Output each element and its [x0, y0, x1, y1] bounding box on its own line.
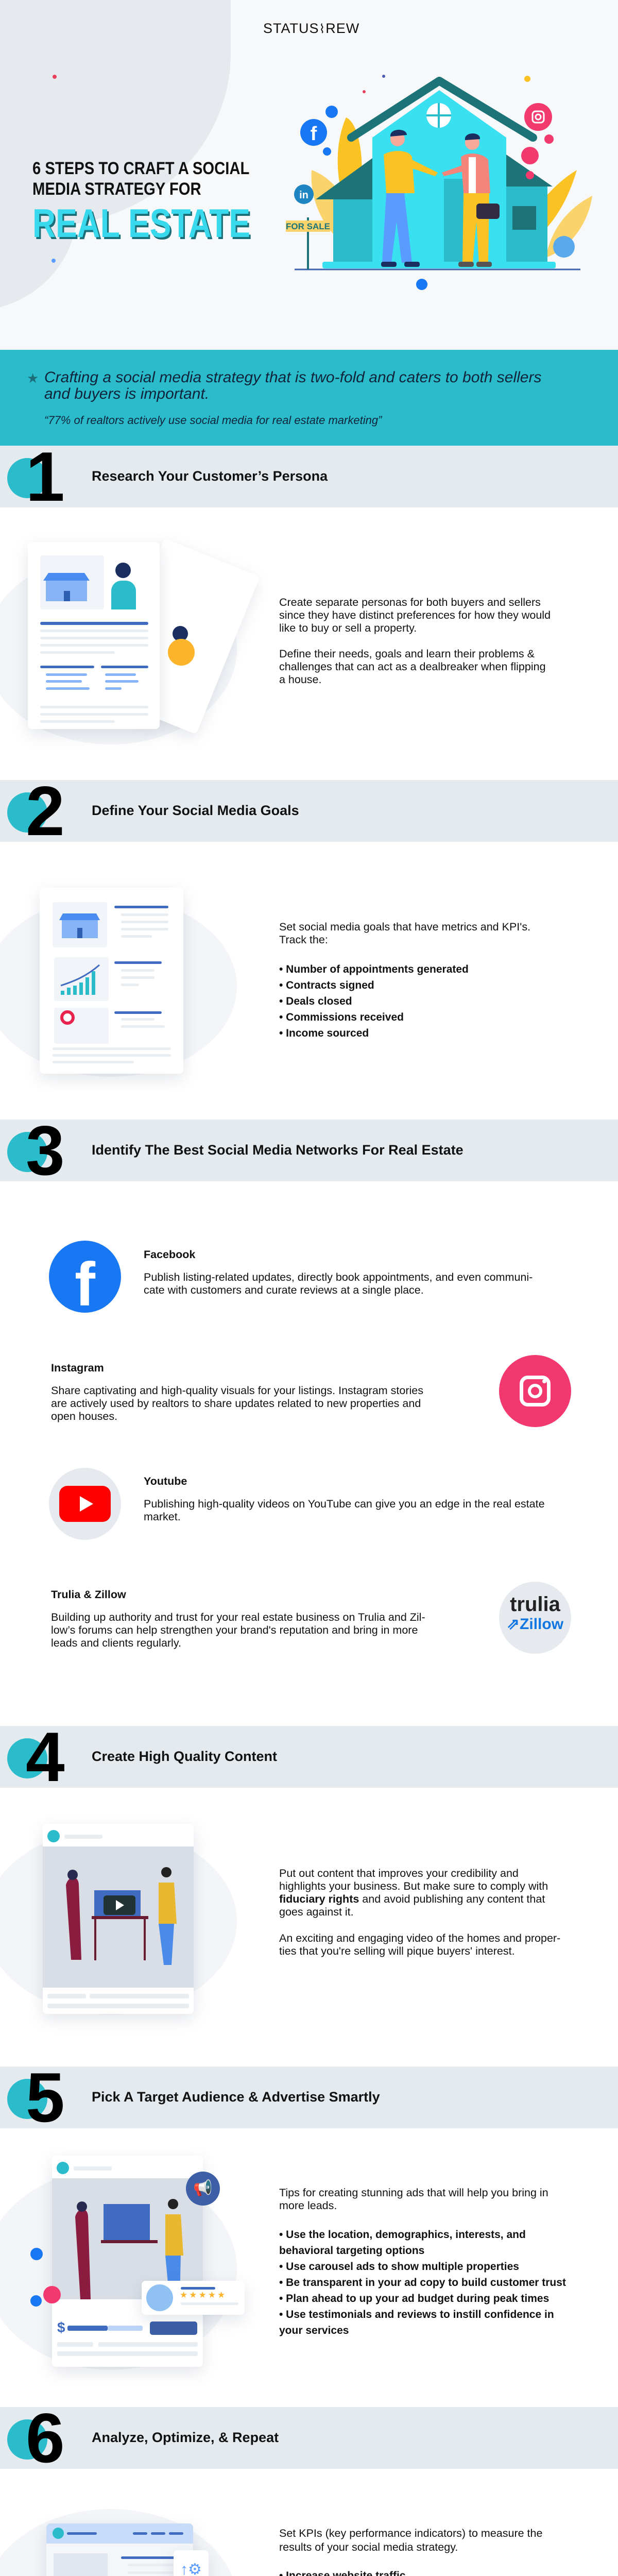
- step 6 header: 6: [26, 2399, 65, 2477]
- step 3 header: 3: [26, 1111, 65, 1190]
- instagram text: Instagram: [51, 1362, 104, 1374]
- step 1 text: a house.: [279, 673, 321, 686]
- step 2 illustration: [0, 895, 237, 1083]
- step 1 text: [279, 596, 551, 686]
- title: REAL ESTATE: [32, 200, 250, 246]
- step 5 header: [0, 2066, 618, 2128]
- intro band: [0, 350, 618, 446]
- step 6 text: [279, 2527, 542, 2553]
- facebook text: Publish listing-related updates, directly book appointments, and even communi-: [144, 1271, 533, 1283]
- icon: trulia & zillow: trulia: [510, 1593, 560, 1616]
- step 3 header: Identify The Best Social Media Networks For Real Estate: [92, 1142, 464, 1158]
- step 3 header: [0, 1120, 618, 1181]
- quote: “77% of realtors actively use social media for real estate marketing”: [44, 414, 382, 427]
- step 5 bullets: • Plan ahead to up your ad budget during peak times: [279, 2293, 549, 2304]
- step 5 text: Tips for creating stunning ads that will help you bring in: [279, 2187, 548, 2199]
- intro text: Crafting a social media strategy that is two-fold and caters to both sellers: [44, 369, 541, 386]
- icon: trulia & zillow: ⇗Zillow: [507, 1616, 563, 1633]
- youtube text: [144, 1475, 545, 1523]
- icon: youtube: [49, 1468, 121, 1540]
- step 5 illustration: [0, 2162, 249, 2376]
- step 4 text: An exciting and engaging video of the homes and proper-: [279, 1932, 560, 1944]
- instagram text: Share captivating and high-quality visuals for your listings. Instagram stories: [51, 1384, 423, 1397]
- header background: [0, 0, 618, 350]
- step 6 text: results of your social media strategy.: [279, 2541, 458, 2553]
- step 2 bullets: • Number of appointments generated: [279, 963, 469, 975]
- youtube text: market.: [144, 1511, 181, 1523]
- trulia text: leads and clients regularly.: [51, 1637, 181, 1649]
- instagram text: are actively used by realtors to share updates related to new properties and: [51, 1397, 421, 1410]
- step 5 header: 5: [26, 2058, 65, 2137]
- review card: ★★★★★: [180, 2290, 227, 2300]
- youtube text: Publishing high-quality videos on YouTube can give you an edge in the real estate: [144, 1498, 545, 1510]
- step 4 illustration: [0, 1830, 237, 2024]
- logo: statusbrew: STATUS⌇REW: [263, 21, 359, 36]
- step 1 header: Research Your Customer’s Persona: [92, 468, 328, 484]
- step 4 text: Put out content that improves your credibility and: [279, 1867, 519, 1879]
- title: 6 STEPS TO CRAFT A SOCIAL: [32, 159, 249, 178]
- step 1 text: Define their needs, goals and learn their problems &: [279, 648, 535, 660]
- step 2 text: Track the:: [279, 934, 328, 946]
- youtube text: Youtube: [144, 1475, 187, 1487]
- title: MEDIA STRATEGY FOR: [32, 179, 201, 199]
- step 2 header: [0, 780, 618, 842]
- step 5 header: Pick A Target Audience & Advertise Smartly: [92, 2089, 380, 2105]
- trulia text: Trulia & Zillow: [51, 1588, 126, 1601]
- instagram text: [51, 1362, 423, 1422]
- step 2 bullets: • Commissions received: [279, 1011, 404, 1023]
- intro text: and buyers is important.: [44, 385, 209, 402]
- step 5 bullets: • Use testimonials and reviews to instill confidence in: [279, 2309, 554, 2320]
- trulia text: low’s forums can help strengthen your brand's reputation and bring in more: [51, 1624, 418, 1636]
- step 4 text: ties that you're selling will pique buyers' interest.: [279, 1945, 515, 1957]
- step 5 text: [279, 2187, 548, 2212]
- step 1 text: since they have distinct preferences for how they would: [279, 609, 551, 621]
- title: [32, 159, 251, 246]
- trulia text: Building up authority and trust for your real estate business on Trulia and Zil-: [51, 1611, 425, 1623]
- step 5 bullets: behavioral targeting options: [279, 2245, 424, 2257]
- hero illustration: house & handshake: in: [299, 190, 308, 201]
- icon: instagram: [499, 1355, 571, 1427]
- step 2 bullets: • Deals closed: [279, 995, 352, 1007]
- step 2 bullets: • Contracts signed: [279, 979, 374, 991]
- review card: [142, 2281, 245, 2315]
- step 5 illustration: $: [57, 2319, 65, 2335]
- step 5 bullets: • Be transparent in your ad copy to build customer trust: [279, 2277, 566, 2289]
- step 1 text: Create separate personas for both buyers and sellers: [279, 596, 541, 608]
- facebook text: [144, 1248, 533, 1296]
- step 1 header: [0, 446, 618, 507]
- step 5 bullets: • Use carousel ads to show multiple properties: [279, 2261, 519, 2273]
- icon: upload card: [174, 2550, 209, 2576]
- icon: facebook: [49, 1241, 121, 1313]
- icon: facebook: f: [75, 1250, 95, 1319]
- step 5 bullets: [279, 2229, 566, 2336]
- step 2 text: Set social media goals that have metrics and KPI's.: [279, 921, 530, 933]
- step 4 header: Create High Quality Content: [92, 1749, 277, 1764]
- step 2 bullets: • Income sourced: [279, 1027, 369, 1039]
- step 5 bullets: your services: [279, 2325, 349, 2336]
- step 5 text: more leads.: [279, 2199, 337, 2212]
- icon: megaphone: 📢: [193, 2180, 213, 2197]
- icon: star: ★: [27, 370, 39, 386]
- hero illustration: house & handshake: FOR SALE: [286, 222, 330, 231]
- step 1 header: 1: [26, 437, 65, 516]
- facebook text: cate with customers and curate reviews at a single place.: [144, 1284, 424, 1296]
- step 4 header: [0, 1726, 618, 1788]
- icon: megaphone: [186, 2172, 220, 2206]
- step 1 text: challenges that can act as a dealbreaker when flipping: [279, 660, 546, 673]
- step 6 header: Analyze, Optimize, & Repeat: [92, 2430, 279, 2445]
- step 4 text: highlights your business. But make sure to comply with: [279, 1880, 548, 1892]
- step 4 header: 4: [26, 1718, 65, 1796]
- step 4 text: goes against it.: [279, 1906, 354, 1918]
- facebook text: Facebook: [144, 1248, 195, 1261]
- hero illustration: house & handshake: f: [311, 123, 317, 145]
- step 2 bullets: [279, 963, 469, 1039]
- step 4 text: fiduciary rights and avoid publishing any content that: [279, 1893, 545, 1905]
- step 6 illustration: [0, 2509, 232, 2576]
- instagram text: open houses.: [51, 1410, 117, 1422]
- step 6 header: [0, 2407, 618, 2469]
- intro text: [44, 369, 541, 402]
- step 1 text: like to buy or sell a property.: [279, 622, 417, 634]
- step 4 text: [279, 1867, 560, 1957]
- step 6 text: Set KPIs (key performance indicators) to measure the: [279, 2527, 542, 2539]
- step 2 header: 2: [26, 772, 65, 850]
- hero illustration: house & handshake: [52, 75, 592, 290]
- icon: trulia & zillow: [499, 1582, 571, 1654]
- trulia text: [51, 1588, 425, 1649]
- step 2 text: [279, 921, 530, 946]
- step 1 illustration: [0, 541, 258, 744]
- step 5 bullets: • Use the location, demographics, interests, and: [279, 2229, 526, 2241]
- step 2 header: Define Your Social Media Goals: [92, 803, 299, 818]
